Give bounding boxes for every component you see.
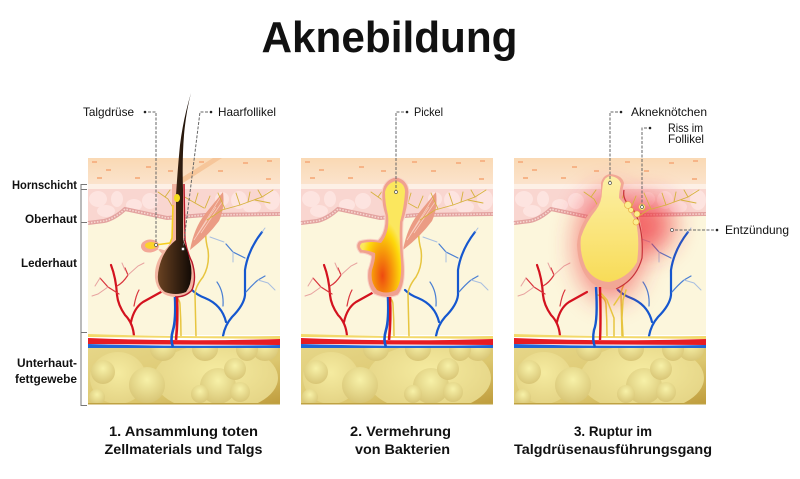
panel 2 lower vessels (384, 297, 390, 347)
caption 1 (104, 423, 263, 457)
caption 2: 2. Vermehrung (350, 423, 451, 439)
callout: Haarfollikel: Haarfollikel (218, 105, 276, 119)
label: Unterhautfettgewebe (15, 356, 77, 386)
callout: Pickel (394, 105, 443, 194)
label: Lederhaut: Lederhaut (21, 256, 77, 270)
panel 2 pimple (357, 177, 409, 297)
caption 2: von Bakterien (355, 441, 450, 457)
panel 3 lower vessels (593, 287, 600, 347)
label: Unterhautfettgewebe: Unterhaut- (17, 356, 77, 370)
panel 3 lower nerve fork (600, 290, 626, 336)
panel 3 ruptured follicle (577, 174, 643, 289)
panel 3 rupture droplets (624, 202, 645, 225)
label: Oberhaut: Oberhaut (25, 212, 77, 226)
panel 3: rupture in sebaceous duct (514, 158, 706, 412)
caption 1: 1. Ansammlung toten (109, 423, 258, 439)
callout: Talgdrüse: Talgdrüse (83, 105, 134, 119)
callout: Riss im Follikel: Follikel (668, 132, 704, 146)
panel 1 lower vessels (172, 297, 177, 347)
label: Hornschicht: Hornschicht (12, 178, 77, 192)
panel 2: bacterial growth (301, 158, 493, 412)
caption 2 (350, 423, 451, 457)
callout: Entzündung: Entzündung (725, 223, 789, 237)
panel 1 arrector muscle and nerves (158, 190, 273, 250)
caption 1: Zellmaterials und Talgs (104, 441, 263, 457)
callout: Pickel: Pickel (414, 105, 443, 119)
callout: Entzündung (670, 223, 789, 237)
callout: Akneknötchen (608, 105, 707, 184)
panel 3 nerves (584, 190, 699, 220)
label: Unterhautfettgewebe: fettgewebe (15, 372, 77, 386)
panel 1: accumulation of dead cells and sebum (88, 93, 280, 412)
caption 3: 3. Ruptur im (574, 423, 652, 439)
title: Aknebildung (262, 13, 518, 62)
panel 3 inflammation glow (576, 189, 674, 301)
caption 3 (514, 423, 712, 457)
callout: Talgdrüse (83, 105, 158, 246)
left layer bracket (81, 184, 87, 406)
callout: Riss im Follikel (640, 121, 704, 208)
callout: Riss im Follikel: Riss im (668, 121, 703, 135)
caption 3: Talgdrüsenausführungsgang (514, 441, 712, 457)
callout: Haarfollikel (182, 105, 276, 250)
panel 2 arrector muscle and nerves (371, 190, 486, 250)
panel 1 hair follicle (140, 93, 194, 297)
callout: Akneknötchen: Akneknötchen (631, 105, 707, 119)
panel 1 pore streak (181, 158, 222, 183)
